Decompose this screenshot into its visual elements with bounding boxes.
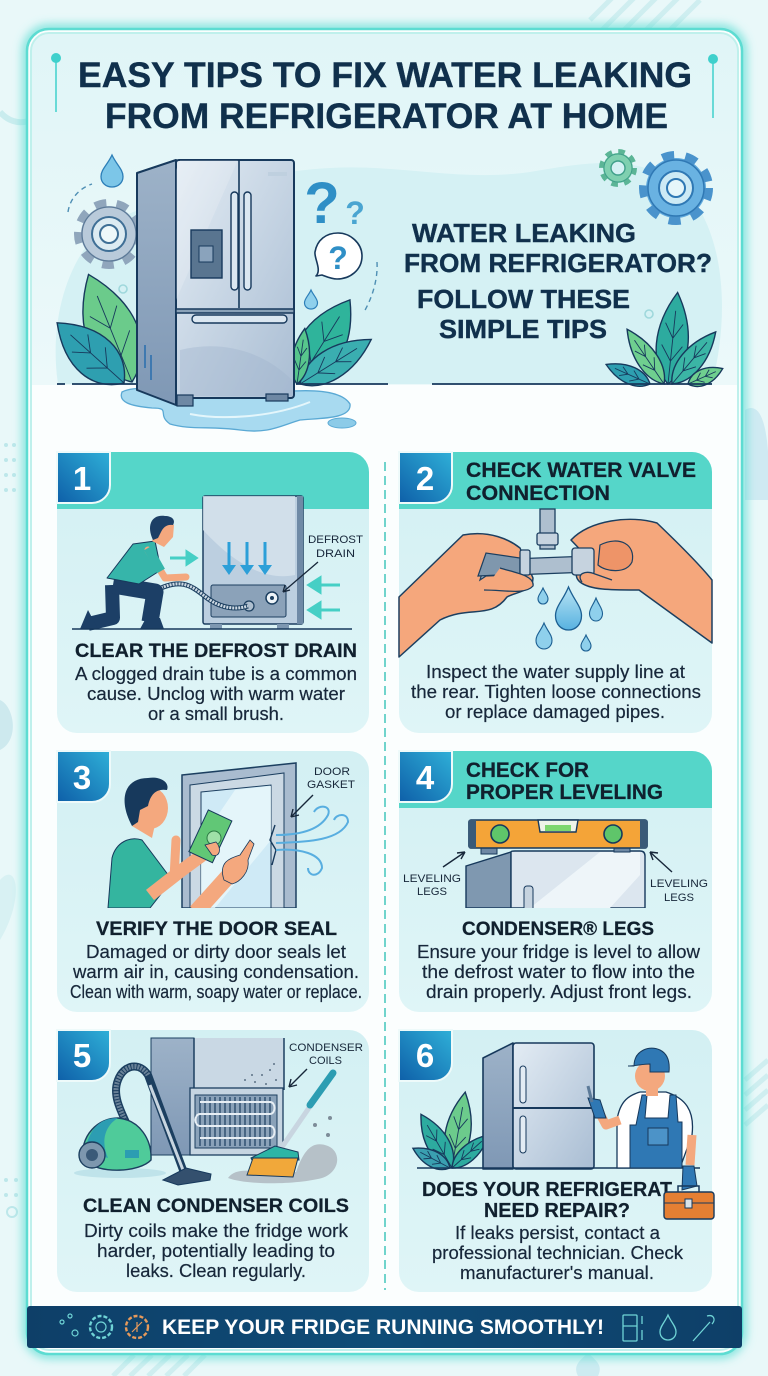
icons: question marks: ?	[304, 171, 340, 236]
step 6 number badge: 6	[416, 1037, 434, 1074]
step 3 body text: Clean with warm, soapy water or replace.	[70, 982, 362, 1002]
callout: leveling legs left	[403, 852, 465, 898]
icon: small green gear	[603, 153, 633, 183]
title: EASY TIPS TO FIX WATER LEAKING	[78, 56, 692, 95]
step 6 illustration: technician and fridge	[409, 1043, 700, 1190]
hero callout text: SIMPLE TIPS	[439, 314, 607, 344]
callout: condenser coils label	[289, 1042, 363, 1087]
step 5 number badge: 5	[73, 1037, 91, 1074]
step 6 body text	[432, 1223, 684, 1283]
step 5 body text: leaks. Clean regularly.	[126, 1261, 306, 1281]
panel: step 1	[57, 452, 369, 733]
hero callout text: WATER LEAKING	[412, 218, 636, 248]
callout: condenser coils label: COILS	[309, 1055, 342, 1067]
step 3 number badge	[57, 751, 110, 802]
icon: water drop top left	[101, 155, 123, 187]
callout: leveling legs left: LEGS	[417, 886, 447, 898]
step 4 heading: PROPER LEVELING	[466, 781, 663, 804]
callout: defrost drain label	[283, 534, 363, 592]
step 2 number badge	[399, 452, 452, 503]
step 6 body text: If leaks persist, contact a	[455, 1223, 661, 1243]
step 6 body text: manufacturer's manual.	[460, 1263, 654, 1283]
step 4 body text: Ensure your fridge is level to allow	[417, 942, 701, 962]
callout: door gasket label	[291, 766, 355, 817]
step 3 body text: Damaged or dirty door seals let	[86, 942, 346, 962]
step 4 illustration: spirit level on fridge	[466, 820, 647, 916]
hero callout text	[404, 218, 712, 344]
step 4 heading	[466, 759, 663, 804]
plants centre	[279, 288, 379, 397]
fridge illustration	[137, 160, 294, 406]
step 5 number badge	[57, 1030, 110, 1081]
callout: door gasket label: DOOR	[314, 766, 350, 778]
step 5 heading: CLEAN CONDENSER COILS	[83, 1196, 349, 1217]
step 6 heading: NEED REPAIR?	[484, 1200, 630, 1222]
dashed arcs around gear	[68, 184, 377, 312]
callout: leveling legs right	[650, 852, 708, 904]
panel: step 5	[57, 1030, 369, 1292]
icons: question marks: ?	[345, 195, 365, 231]
step 2 body text: Inspect the water supply line at	[426, 662, 685, 682]
callout: leveling legs right: LEGS	[664, 892, 694, 904]
step 5 illustration: coils, vacuum and brush	[74, 1038, 337, 1185]
step 2 body text: or replace damaged pipes.	[445, 702, 665, 722]
person crouching	[80, 516, 186, 629]
step 3 number badge: 3	[73, 759, 91, 796]
hero callout text: FROM REFRIGERATOR?	[404, 248, 712, 278]
callout: leveling legs right: LEVELING	[650, 878, 708, 890]
step 6 heading: DOES YOUR REFRIGERAT	[422, 1179, 672, 1201]
step 4 body text: the defrost water to flow into the	[422, 962, 695, 982]
icons: left of banner	[60, 1314, 112, 1338]
step 1 number badge	[57, 452, 110, 503]
panel: step 4	[399, 751, 712, 1012]
water puddle	[121, 388, 356, 431]
step 3 body text	[70, 942, 362, 1002]
step 1 number badge: 1	[73, 460, 91, 497]
title pin decorations	[51, 53, 718, 118]
step 4 number badge: 4	[416, 759, 435, 796]
step 4 heading: CHECK FOR	[466, 759, 589, 782]
step 4 body text: drain properly. Adjust front legs.	[426, 982, 692, 1002]
ground line	[57, 383, 712, 385]
icon: small ring	[119, 285, 127, 293]
step 6 body text: professional technician. Check	[432, 1243, 684, 1263]
step 1 body text: cause. Unclog with warm water	[87, 684, 345, 704]
step 2 number badge: 2	[416, 460, 434, 497]
icons: question marks	[304, 171, 365, 236]
step 4 number badge	[399, 751, 452, 802]
step 5 body text: harder, potentially leading to	[97, 1241, 335, 1261]
plants right	[603, 291, 726, 392]
icon: speech bubble question	[315, 233, 362, 279]
step 3 heading: VERIFY THE DOOR SEAL	[96, 919, 337, 940]
callout: leveling legs left: LEVELING	[403, 873, 461, 885]
icon: orange gear	[126, 1316, 148, 1338]
title: FROM REFRIGERATOR AT HOME	[105, 97, 668, 136]
step 6 heading	[422, 1179, 672, 1222]
title	[78, 56, 692, 136]
step 4 subheading: CONDENSER® LEGS	[462, 919, 654, 940]
icon: orange toolbox	[664, 1186, 714, 1219]
step 4 body text	[417, 942, 701, 1002]
icon: speech bubble question: ?	[328, 240, 348, 276]
step 2 heading: CHECK WATER VALVE	[466, 459, 696, 482]
step 3 illustration: door seal check	[108, 763, 348, 912]
callout: door gasket label: GASKET	[307, 779, 355, 791]
step 6 number badge	[399, 1030, 452, 1081]
icon: large blue gear	[646, 158, 706, 218]
icon: ring right	[645, 310, 653, 318]
step 1 heading: CLEAR THE DEFROST DRAIN	[75, 641, 357, 662]
panel: step 3	[57, 751, 369, 1012]
plants left	[43, 265, 156, 399]
centre dashed divider	[384, 462, 386, 1290]
step 1 body text	[75, 664, 357, 724]
icons: right of banner	[623, 1315, 714, 1341]
panel: step 6	[399, 1030, 714, 1292]
callout: defrost drain label: DRAIN	[316, 548, 355, 560]
callout: condenser coils label: CONDENSER	[289, 1042, 363, 1054]
step 5 body text	[84, 1221, 349, 1281]
icon: grey gear	[81, 206, 137, 262]
hero callout text: FOLLOW THESE	[417, 284, 630, 314]
panel: step 2	[399, 452, 712, 733]
step 2 body text	[411, 662, 701, 722]
footer banner	[27, 1306, 742, 1348]
step 2 body text: the rear. Tighten loose connections	[411, 682, 701, 702]
step 2 illustration: hands and valve	[399, 509, 712, 657]
step 1 illustration	[72, 496, 363, 629]
step 5 body text: Dirty coils make the fridge work	[84, 1221, 349, 1241]
step 2 heading	[466, 459, 696, 505]
icon: small water drop	[304, 290, 318, 309]
step 3 body text: warm air in, causing condensation.	[72, 962, 359, 982]
callout: defrost drain label: DEFROST	[308, 534, 363, 546]
step 2 heading: CONNECTION	[466, 482, 610, 505]
hero background blob	[56, 163, 722, 384]
step 1 body text: or a small brush.	[148, 704, 284, 724]
footer text: KEEP YOUR FRIDGE RUNNING SMOOTHLY!	[162, 1316, 604, 1339]
step 1 body text: A clogged drain tube is a common	[75, 664, 357, 684]
